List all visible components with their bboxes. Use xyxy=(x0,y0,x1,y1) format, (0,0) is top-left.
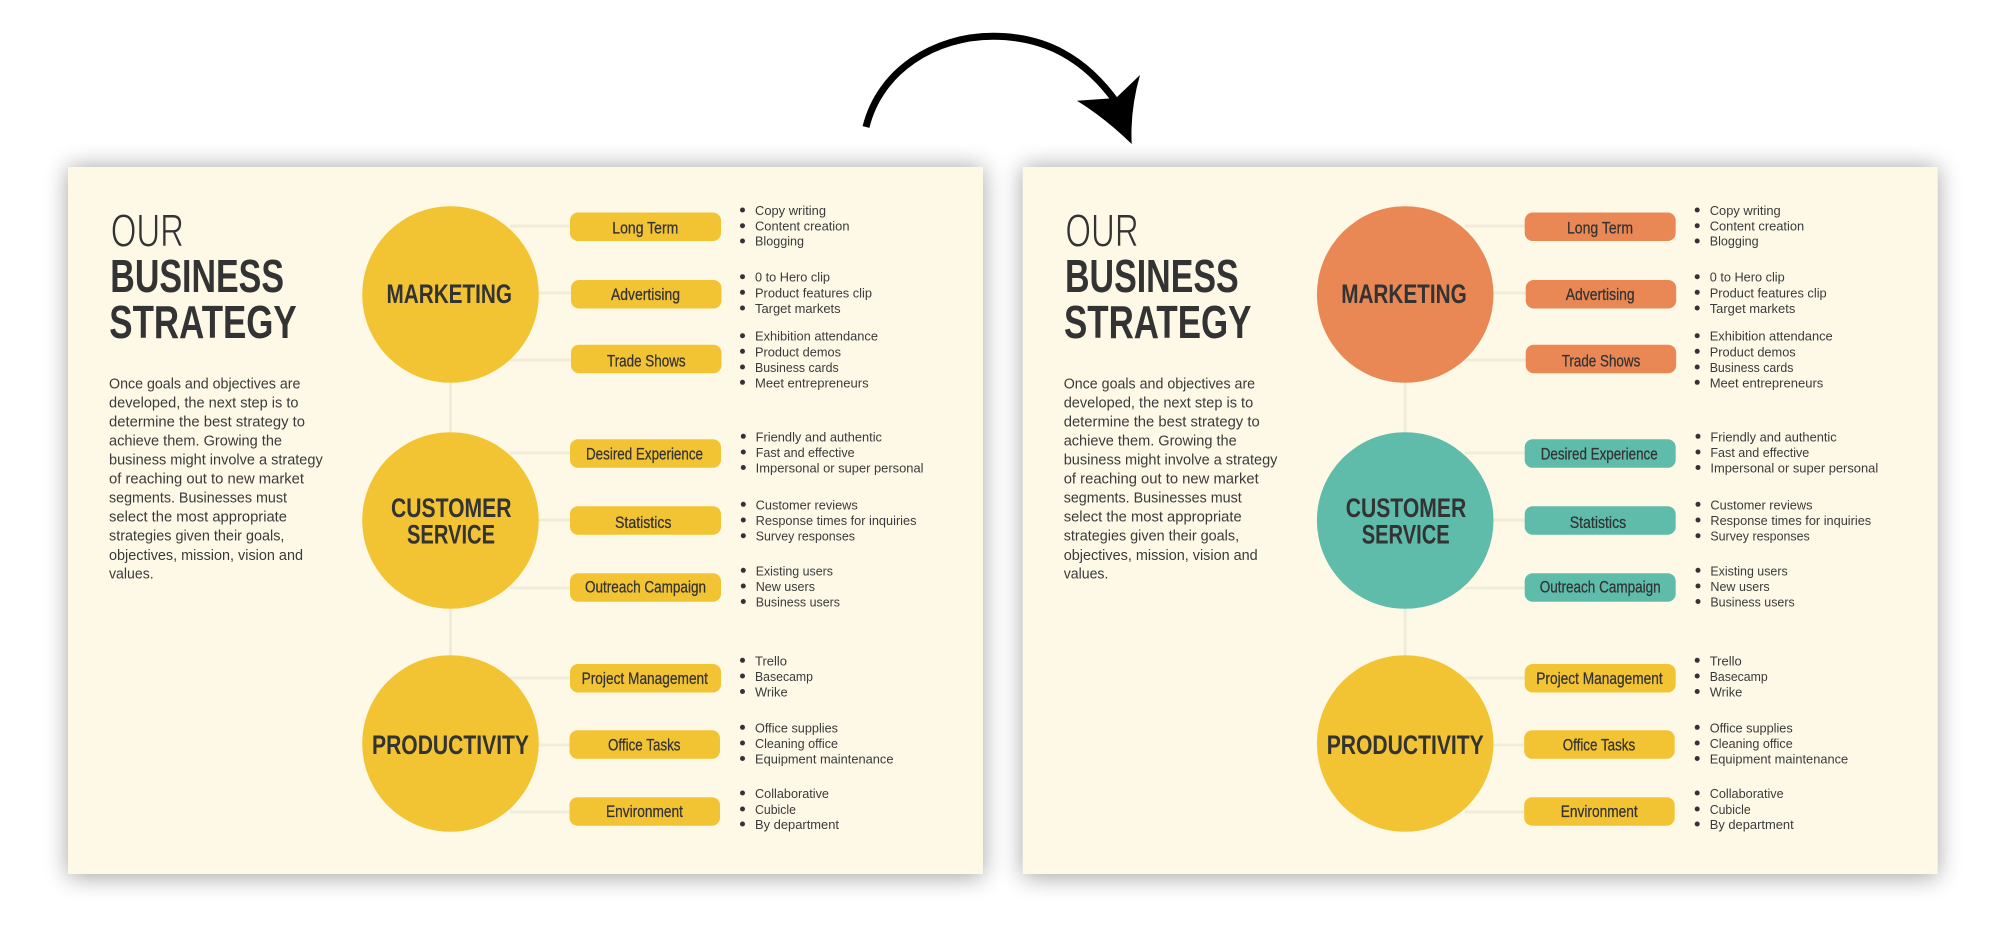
text block: description: Once goals and objectives are xyxy=(1064,376,1255,392)
list: Long Term: Copy writing xyxy=(755,204,826,218)
list: Trade Shows: Business cards xyxy=(755,361,839,375)
list: Statistics: Survey responses xyxy=(1710,530,1810,544)
list: Office Tasks: Office supplies xyxy=(1710,721,1793,735)
text block: description: developed, the next step is to xyxy=(109,395,298,411)
list: Project Management: Wrike xyxy=(755,686,788,700)
list: Desired Experience: Impersonal or super personal xyxy=(1710,462,1878,476)
pill: Office Tasks: Office Tasks xyxy=(608,736,680,755)
list: Project Management: Basecamp xyxy=(755,670,813,684)
list: Project Management: Basecamp xyxy=(1710,670,1768,684)
list: Outreach Campaign xyxy=(1696,564,1795,610)
list: Project Management xyxy=(740,654,813,700)
circle: customer service xyxy=(1317,432,1494,609)
circle: marketing xyxy=(362,206,539,383)
title xyxy=(1064,204,1251,348)
list: Trade Shows: Business cards xyxy=(1710,361,1793,375)
text block: description: strategies given their goals, xyxy=(109,529,284,545)
list: Statistics: Survey responses xyxy=(756,530,855,544)
list: Trade Shows: Product demos xyxy=(755,345,841,359)
pill: Outreach Campaign: Outreach Campaign xyxy=(1540,578,1661,597)
list: Trade Shows: Product demos xyxy=(1710,345,1796,359)
arrow: curved from left panel to right panel xyxy=(866,36,1140,144)
list: Advertising: Product features clip xyxy=(1710,286,1827,300)
list: Outreach Campaign: New users xyxy=(756,580,815,594)
text block: description: objectives, mission, vision and xyxy=(1064,548,1258,564)
pill: Statistics: Statistics xyxy=(1570,513,1626,532)
list: Environment: Cubicle xyxy=(755,803,796,817)
list: Environment: By department xyxy=(1710,818,1794,832)
list: Outreach Campaign: Business users xyxy=(1710,596,1795,610)
list: Outreach Campaign: Existing users xyxy=(756,564,833,578)
list: Project Management: Wrike xyxy=(1710,686,1742,700)
list: Desired Experience: Fast and effective xyxy=(1710,446,1809,460)
list: Statistics: Customer reviews xyxy=(756,498,858,512)
list: Office Tasks: Equipment maintenance xyxy=(755,752,894,766)
list: Desired Experience: Impersonal or super personal xyxy=(756,462,924,476)
list: Long Term: Content creation xyxy=(1710,220,1804,234)
text block: description: determine the best strategy to xyxy=(109,414,305,430)
circle: marketing: MARKETING xyxy=(1341,279,1467,309)
list: Office Tasks: Cleaning office xyxy=(1710,737,1793,751)
list: Environment xyxy=(740,787,840,832)
list: Outreach Campaign: New users xyxy=(1710,580,1770,594)
list: Project Management: Trello xyxy=(1710,654,1742,668)
list: Desired Experience: Friendly and authentic xyxy=(1710,430,1837,444)
list: Environment: Collaborative xyxy=(1710,787,1784,801)
text block: description: strategies given their goals, xyxy=(1064,529,1239,545)
panel: coloured version xyxy=(1023,167,1938,874)
title: STRATEGY xyxy=(1064,296,1251,348)
text block: description: segments. Businesses must xyxy=(1064,490,1242,506)
pill: Desired Experience xyxy=(1525,439,1676,468)
list: Outreach Campaign: Existing users xyxy=(1710,564,1788,578)
pill: Environment: Environment xyxy=(1561,802,1638,821)
text block: description: business might involve a strategy xyxy=(109,453,324,469)
pill: Long Term xyxy=(570,212,721,241)
circle: productivity xyxy=(362,655,539,832)
pill: Project Management xyxy=(570,664,721,692)
title: BUSINESS xyxy=(1065,250,1239,302)
text block: description: determine the best strategy to xyxy=(1064,414,1260,430)
pill: Environment: Environment xyxy=(606,802,683,821)
pill: Project Management xyxy=(1525,664,1676,692)
list: Trade Shows xyxy=(740,330,878,390)
list: Statistics: Response times for inquiries xyxy=(1710,514,1871,528)
list: Trade Shows: Meet entrepreneurs xyxy=(1710,376,1823,390)
list: Outreach Campaign xyxy=(741,564,840,610)
list: Outreach Campaign: Business users xyxy=(756,596,840,610)
pill: Long Term: Long Term xyxy=(612,218,678,237)
pill: Statistics xyxy=(1525,506,1676,535)
list: Long Term xyxy=(1695,204,1804,249)
connector lines xyxy=(1405,226,1526,812)
list: Environment: Collaborative xyxy=(755,787,829,801)
text block: description: select the most appropriate xyxy=(109,509,287,525)
pill: Advertising: Advertising xyxy=(1566,285,1635,304)
list: Long Term: Content creation xyxy=(755,220,850,234)
pill: Project Management: Project Management xyxy=(1536,669,1663,688)
list: Environment: Cubicle xyxy=(1710,803,1751,817)
list: Project Management: Trello xyxy=(755,654,787,668)
circle: customer service: CUSTOMER xyxy=(1346,493,1466,523)
text block: description: Once goals and objectives are xyxy=(109,376,300,392)
pill: Statistics: Statistics xyxy=(615,513,672,532)
pill: Long Term xyxy=(1525,212,1676,241)
list: Advertising: 0 to Hero clip xyxy=(1710,271,1785,285)
pill: Long Term: Long Term xyxy=(1567,218,1633,237)
pill: Environment xyxy=(1524,797,1675,826)
list: Trade Shows: Exhibition attendance xyxy=(755,330,878,344)
list: Statistics xyxy=(1696,498,1871,544)
pill: Outreach Campaign xyxy=(1525,573,1676,602)
circle: customer service: SERVICE xyxy=(407,520,495,550)
pill: Environment xyxy=(570,797,720,826)
pill: Desired Experience xyxy=(570,439,721,468)
pill: Outreach Campaign: Outreach Campaign xyxy=(585,578,706,597)
list: Desired Experience xyxy=(1696,430,1878,476)
text block: description xyxy=(1064,376,1278,583)
pill: Office Tasks: Office Tasks xyxy=(1563,736,1635,755)
text block: description: achieve them. Growing the xyxy=(1064,433,1237,449)
list: Trade Shows: Meet entrepreneurs xyxy=(755,376,869,390)
title: STRATEGY xyxy=(109,296,297,348)
text block: description: of reaching out to new market xyxy=(109,471,304,487)
title: OUR xyxy=(111,204,184,256)
list: Long Term: Blogging xyxy=(1710,235,1759,249)
list: Office Tasks xyxy=(1695,721,1848,766)
text block: description: developed, the next step is to xyxy=(1064,395,1253,411)
pill: Trade Shows: Trade Shows xyxy=(607,352,686,371)
pill: Desired Experience: Desired Experience xyxy=(1541,444,1658,463)
list: Long Term: Blogging xyxy=(755,235,804,249)
list: Desired Experience: Friendly and authentic xyxy=(756,430,882,444)
panel: yellow version xyxy=(68,167,983,874)
text block: description: values. xyxy=(109,567,154,583)
list: Statistics xyxy=(741,498,916,544)
list: Statistics: Response times for inquiries xyxy=(756,514,916,528)
list: Project Management xyxy=(1695,654,1768,700)
list: Advertising xyxy=(1695,271,1827,316)
title: OUR xyxy=(1065,204,1139,256)
pill: Desired Experience: Desired Experience xyxy=(586,444,703,463)
pill: Advertising xyxy=(571,280,722,308)
list: Environment: By department xyxy=(755,818,840,832)
list: Trade Shows xyxy=(1695,330,1833,390)
list: Advertising: Product features clip xyxy=(755,286,872,300)
list: Office Tasks xyxy=(740,721,894,766)
list: Office Tasks: Cleaning office xyxy=(755,737,838,751)
text block: description: business might involve a strategy xyxy=(1064,453,1278,469)
list: Advertising: 0 to Hero clip xyxy=(755,271,830,285)
list: Statistics: Customer reviews xyxy=(1710,498,1812,512)
pill: Outreach Campaign xyxy=(570,573,721,602)
pill: Trade Shows xyxy=(1526,345,1676,373)
text block: description: segments. Businesses must xyxy=(109,490,287,506)
text block: description: values. xyxy=(1064,567,1108,583)
pill: Office Tasks xyxy=(570,730,720,759)
circle: productivity: PRODUCTIVITY xyxy=(372,730,529,760)
list: Desired Experience: Fast and effective xyxy=(756,446,855,460)
text block: description: achieve them. Growing the xyxy=(109,433,282,449)
circle: customer service xyxy=(362,432,539,609)
text block: description: select the most appropriate xyxy=(1064,509,1242,525)
pill: Trade Shows xyxy=(571,345,722,373)
list: Advertising: Target markets xyxy=(1710,302,1795,316)
list: Office Tasks: Equipment maintenance xyxy=(1710,752,1848,766)
list: Advertising xyxy=(740,271,872,316)
list: Long Term xyxy=(740,204,850,249)
circle: marketing xyxy=(1317,206,1494,383)
circle: customer service: SERVICE xyxy=(1362,520,1450,550)
pill: Office Tasks xyxy=(1524,730,1675,759)
pill: Advertising xyxy=(1526,280,1676,308)
list: Environment xyxy=(1695,787,1794,832)
list: Trade Shows: Exhibition attendance xyxy=(1710,330,1833,344)
pill: Advertising: Advertising xyxy=(611,285,680,304)
pill: Trade Shows: Trade Shows xyxy=(1562,352,1640,371)
text block: description: objectives, mission, vision and xyxy=(109,548,303,564)
pill: Statistics xyxy=(570,506,721,535)
circle: productivity: PRODUCTIVITY xyxy=(1327,730,1484,760)
text block: description xyxy=(109,376,324,583)
connector lines xyxy=(450,226,571,812)
list: Long Term: Copy writing xyxy=(1710,204,1781,218)
pill: Project Management: Project Management xyxy=(582,669,708,688)
list: Office Tasks: Office supplies xyxy=(755,721,838,735)
circle: productivity xyxy=(1317,655,1494,832)
title: BUSINESS xyxy=(110,250,284,302)
circle: customer service: CUSTOMER xyxy=(391,493,512,523)
title xyxy=(109,204,297,348)
list: Advertising: Target markets xyxy=(755,302,841,316)
list: Desired Experience xyxy=(741,430,924,476)
circle: marketing: MARKETING xyxy=(386,279,512,309)
text block: description: of reaching out to new market xyxy=(1064,471,1259,487)
